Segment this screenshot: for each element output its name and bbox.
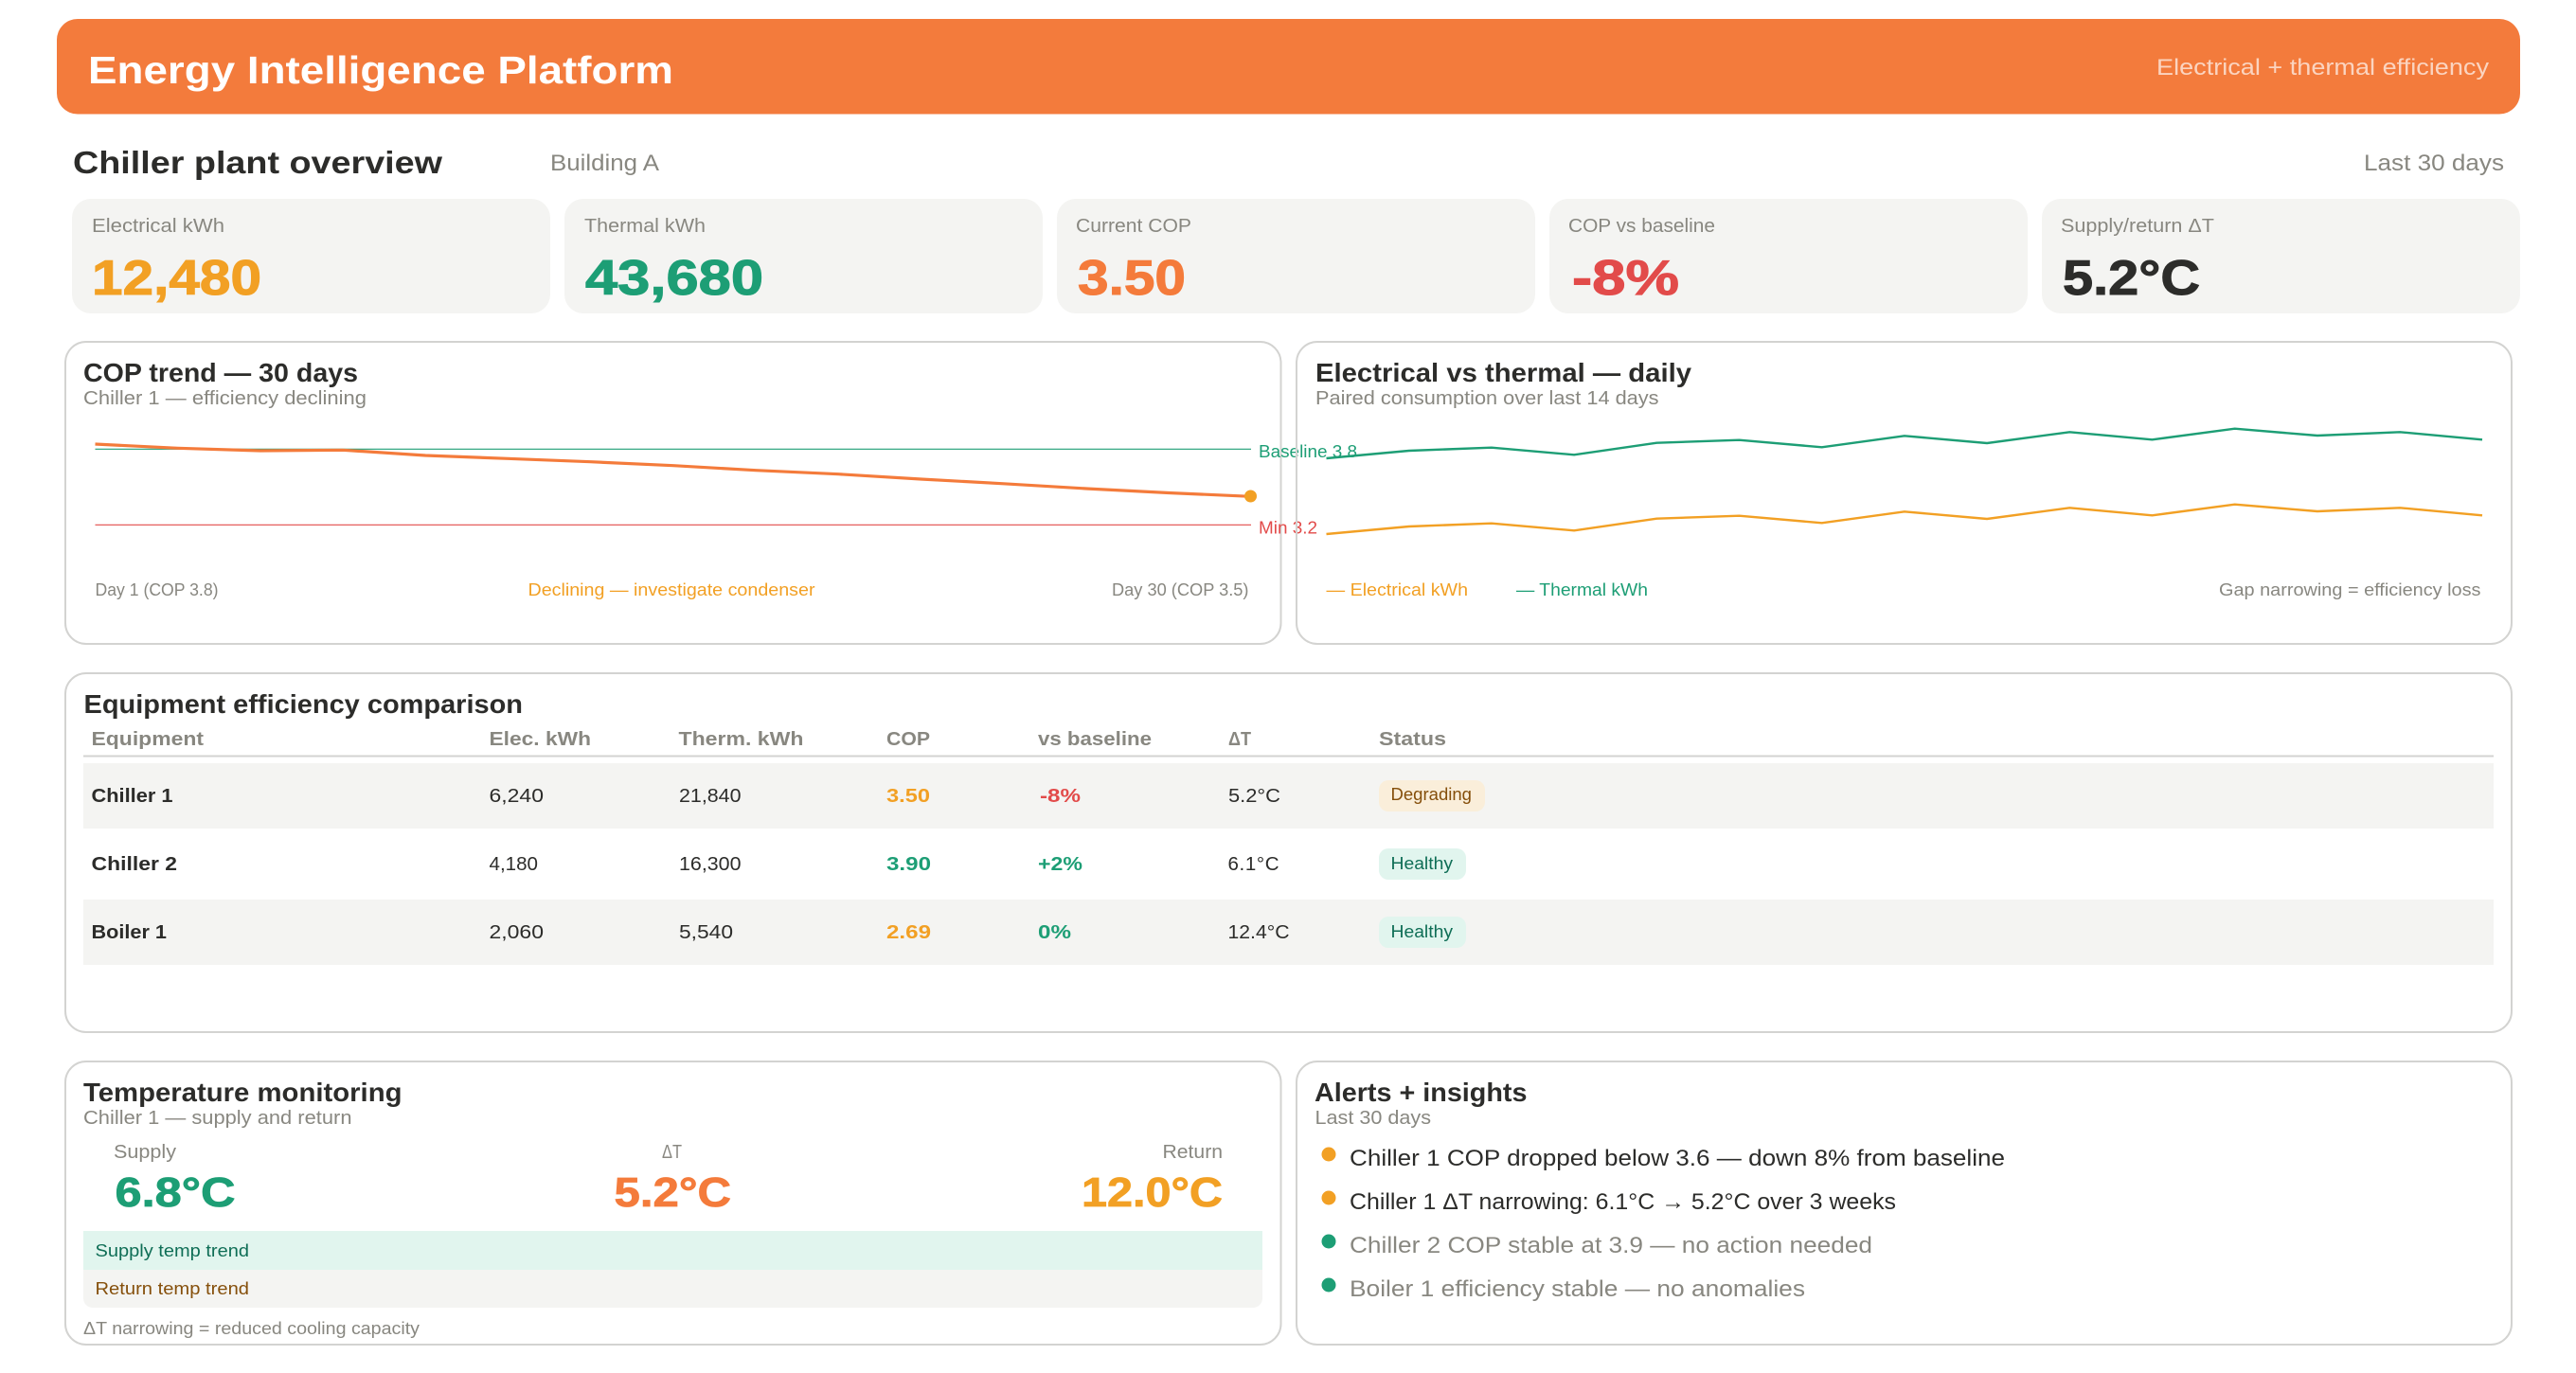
section heading: Chiller plant overview [73,145,442,180]
table row: Chiller 1: -8% [1040,785,1081,807]
table header row: vs baseline [1038,728,1152,750]
KPI: thermal kWh [564,199,1043,313]
table row: Boiler 1: 0% [1038,921,1071,943]
supply reading: Supply [114,1141,177,1163]
status badge: healthy [1379,848,1466,880]
table header row: Status [1379,728,1446,750]
panel: electrical vs thermal [1297,342,2512,644]
temperature subheading: Chiller 1 — supply and return [83,1107,352,1129]
supply trend band: Supply temp trend [95,1240,249,1260]
KPI: COP vs baseline [1549,199,2028,313]
return reading [1082,1141,1223,1216]
title: Energy Intelligence Platform [88,48,673,92]
COP insight label: Declining — investigate condenser [528,580,814,599]
table row: Chiller 1: 21,840 [679,785,741,807]
status badge: degrading [1379,780,1485,811]
delta T reading: 5.2°C [614,1169,731,1216]
time range label: Last 30 days [2364,151,2504,176]
insight 4: Boiler 1 efficiency stable — no anomalies [1350,1276,1805,1302]
alert 1: Chiller 1 COP dropped below 3.6 — down 8% from baseline [1350,1146,2005,1171]
header subtitle: Electrical + thermal efficiency [2156,55,2489,80]
line chart: COP trend: Baseline 3.8 [1259,441,1357,461]
table header row [83,728,2494,756]
supply reading [114,1141,235,1216]
header banner [57,19,2520,114]
KPI: thermal kWh: 43,680 [585,251,763,306]
KPI: COP vs baseline: -8% [1572,251,1679,306]
electrical vs thermal subheading: Paired consumption over last 14 days [1315,387,1659,409]
line chart: thermal kWh [1326,429,2482,458]
legend: thermal: — Thermal kWh [1516,580,1648,599]
table header row: ΔT [1228,728,1251,750]
status badge: healthy: Healthy [1390,853,1454,873]
KPI: electrical kWh: Electrical kWh [92,215,224,237]
table row: Boiler 1: 2,060 [489,921,544,943]
table row: Chiller 2: Chiller 2 [91,853,177,875]
building label: Building A [550,151,659,176]
KPI: current COP: 3.50 [1078,251,1186,306]
table row: Chiller 2 [91,848,1466,880]
panel: equipment table [65,673,2512,1032]
panel: alerts and insights [1297,1061,2512,1345]
electrical vs thermal heading: Electrical vs thermal — daily [1315,358,1691,387]
table row: Chiller 2: 16,300 [679,853,741,875]
table row: Chiller 2: 6.1°C [1227,853,1279,875]
COP end label: Day 30 (COP 3.5) [1112,580,1248,599]
table row: Boiler 1: 12.4°C [1227,921,1290,943]
table row: Boiler 1: 5,540 [679,921,733,943]
panel: temperature monitoring [65,1061,1280,1345]
line chart: electrical kWh [1326,505,2482,534]
legend: electrical: — Electrical kWh [1326,580,1468,599]
return trend band [83,1270,1262,1308]
delta T reading [614,1141,731,1216]
KPI: electrical kWh [72,199,550,313]
KPI: supply/return delta T [2042,199,2520,313]
COP start label: Day 1 (COP 3.8) [95,580,218,599]
table row: Boiler 1: Boiler 1 [91,921,167,943]
status badge: healthy [1379,917,1466,948]
table row: Chiller 1 [83,763,2494,829]
supply trend band [83,1231,1262,1270]
KPI: thermal kWh: Thermal kWh [584,215,706,237]
supply reading: 6.8°C [116,1169,235,1216]
KPI: supply/return delta T: Supply/return ΔT [2061,215,2214,237]
KPI: current COP: Current COP [1076,215,1191,237]
chart note: Gap narrowing = efficiency loss [2219,580,2481,599]
table header row: Elec. kWh [489,728,591,750]
section heading row [73,145,2504,180]
table header row: COP [886,728,930,750]
alerts subheading: Last 30 days [1315,1107,1431,1129]
table row: Chiller 1: 5.2°C [1228,785,1280,807]
KPI: electrical kWh: 12,480 [92,251,261,306]
return reading: Return [1163,1141,1223,1163]
table row: Boiler 1: 2.69 [886,921,931,943]
insight 3: Chiller 2 COP stable at 3.9 — no action needed [1350,1233,1872,1258]
COP subheading: Chiller 1 — efficiency declining [83,387,367,409]
line chart: COP trend [95,441,1357,538]
status badge: degrading: Degrading [1390,784,1472,804]
status badge: healthy: Healthy [1390,921,1454,941]
line chart: COP trend: Min 3.2 [1259,517,1317,538]
return trend band: Return temp trend [95,1278,249,1298]
table heading: Equipment efficiency comparison [83,689,523,719]
temperature heading: Temperature monitoring [83,1078,402,1107]
COP heading: COP trend — 30 days [83,358,358,387]
KPI: COP vs baseline: COP vs baseline [1568,215,1715,237]
table row: Chiller 2: 3.90 [886,853,931,875]
return reading: 12.0°C [1082,1169,1223,1216]
table header row: Therm. kWh [678,728,803,750]
alert 2: Chiller 1 ΔT narrowing: 6.1°C → 5.2°C over 3 weeks [1350,1189,1896,1215]
KPI: supply/return delta T: 5.2°C [2063,251,2200,306]
table row: Chiller 2: 4,180 [489,853,538,875]
table row: Chiller 2: +2% [1038,853,1082,875]
table header row: Equipment [91,728,204,750]
table row: Chiller 1: 3.50 [886,785,930,807]
panel: COP trend [65,342,1357,644]
alerts heading: Alerts + insights [1315,1078,1527,1107]
KPI: current COP [1057,199,1535,313]
table row: Chiller 1: Chiller 1 [91,785,172,807]
temperature footnote: ΔT narrowing = reduced cooling capacity [83,1318,420,1338]
table row: Chiller 1: 6,240 [489,785,544,807]
table row: Boiler 1 [83,900,2494,965]
delta T reading: ΔT [662,1141,682,1163]
